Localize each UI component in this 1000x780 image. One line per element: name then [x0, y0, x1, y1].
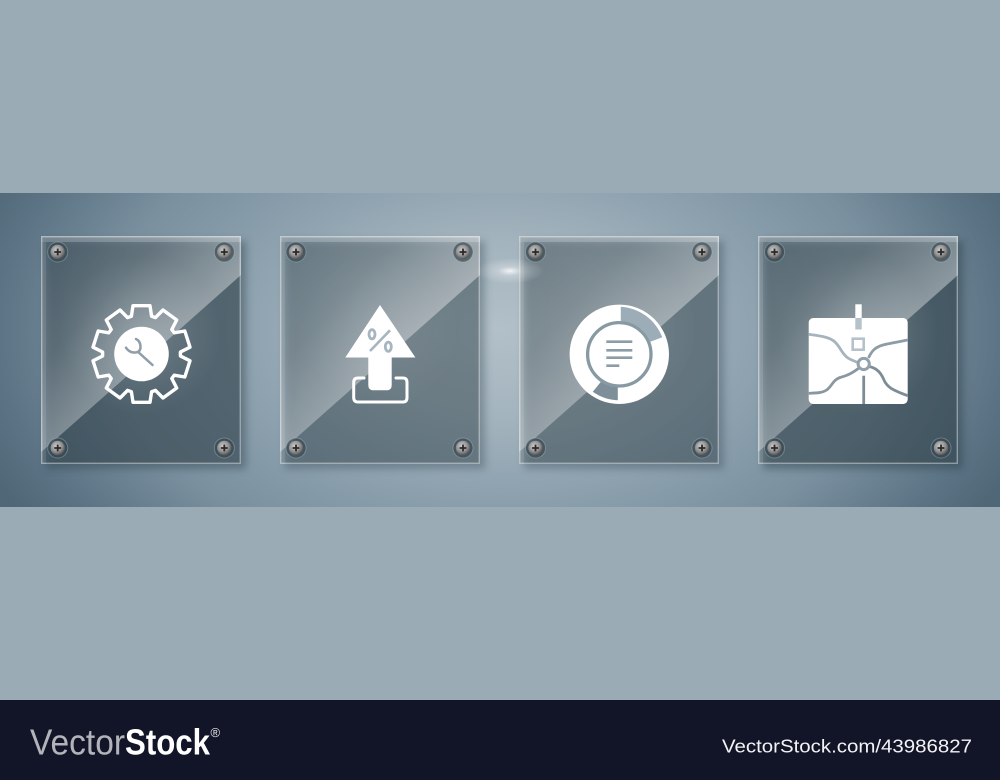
screw: top left [286, 242, 306, 262]
panel: percent arrow glass plate [280, 236, 485, 469]
logo wordmark: ® [210, 725, 220, 740]
screw: top right [214, 242, 234, 262]
screw: bottom left [286, 438, 306, 458]
icon: gear with wrench [93, 306, 190, 402]
screw: bottom right [931, 438, 951, 458]
image id url: VectorStock.com/43986827 [722, 737, 972, 757]
logo wordmark: Stock [125, 722, 211, 762]
screw: top right [692, 242, 712, 262]
lens flare between plates [476, 258, 544, 284]
logo wordmark [30, 722, 220, 762]
background band [0, 193, 1000, 507]
icon: map with route and pin marks [809, 304, 908, 404]
screw: top left [48, 242, 68, 262]
screw: bottom left [764, 438, 784, 458]
logo wordmark: Vector [30, 722, 125, 762]
screw: top right [453, 242, 473, 262]
panel: gear and wrench glass plate [41, 236, 246, 469]
icon: donut chart with text lines [570, 305, 669, 404]
screw: bottom right [214, 438, 234, 458]
screw: bottom left [48, 438, 68, 458]
screw: bottom right [692, 438, 712, 458]
screw: top left [764, 242, 784, 262]
panel: map glass plate [758, 236, 963, 469]
screw: top right [931, 242, 951, 262]
icon: arrow up with percent and tray [345, 305, 415, 402]
screw: bottom right [453, 438, 473, 458]
panel: donut chart glass plate [519, 236, 724, 469]
footer bar [0, 700, 1000, 780]
screw: bottom left [526, 438, 546, 458]
screw: top left [526, 242, 546, 262]
